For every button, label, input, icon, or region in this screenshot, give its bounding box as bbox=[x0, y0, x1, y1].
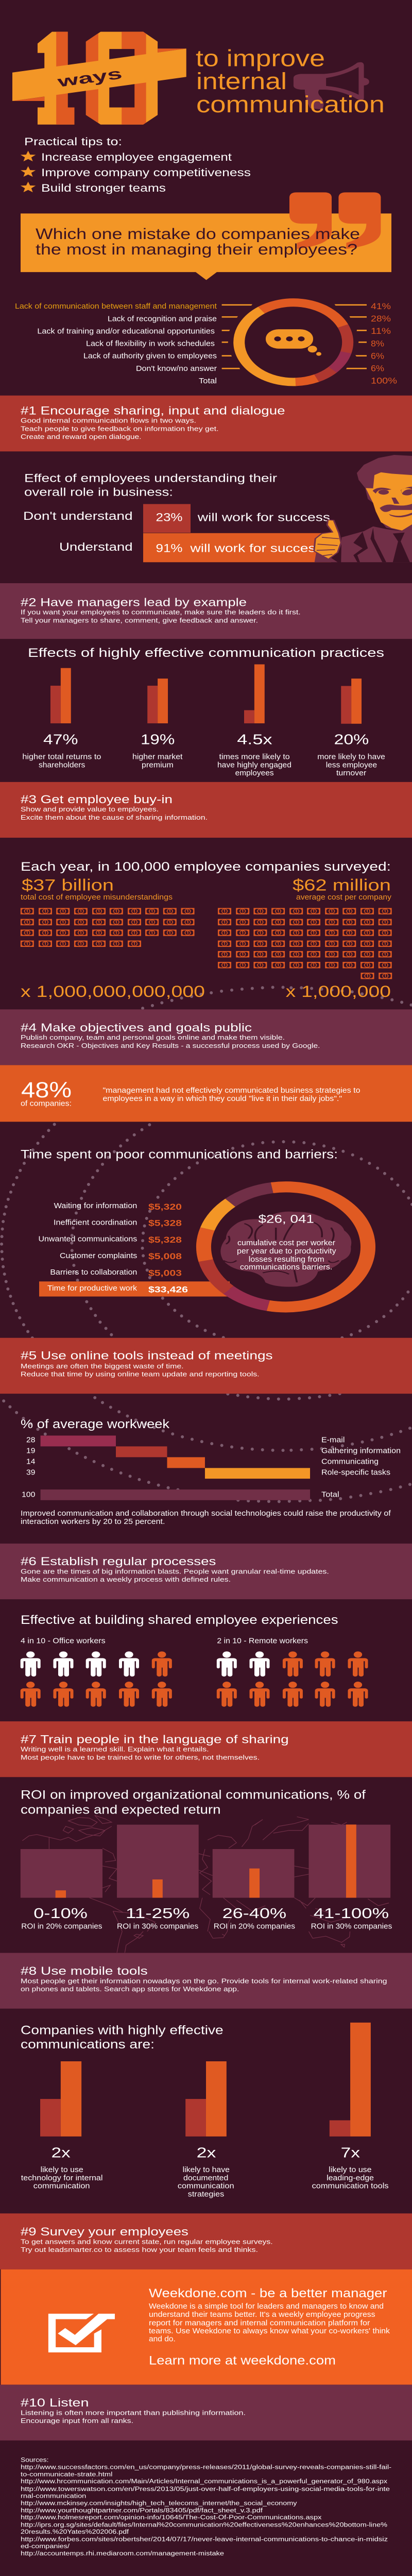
labels: 41-100% bbox=[314, 1906, 389, 1921]
stat: technology: technology for internal bbox=[21, 2174, 102, 2182]
stat: documented strategies bbox=[178, 2145, 234, 2198]
bars bbox=[40, 2023, 371, 2137]
stat: 37 billion: $37 billion bbox=[22, 876, 114, 894]
remote workers bbox=[217, 1636, 368, 1707]
stat: 4.5x: employees bbox=[235, 769, 274, 777]
heading bbox=[21, 1788, 366, 1817]
icon: thought bubble bbox=[266, 329, 321, 356]
labels: 26-40% bbox=[222, 1906, 286, 1921]
multipliers bbox=[21, 982, 391, 1001]
chart: companies with effective communications bbox=[21, 2023, 389, 2198]
legend labels: E-mail bbox=[321, 1435, 345, 1444]
stat: 37 billion bbox=[21, 876, 173, 901]
row labels: Understand bbox=[59, 540, 133, 553]
cost table: $5,008 bbox=[148, 1252, 182, 1261]
panel: tip 6: Gone are the times of big information blasts. People want granular real-time updates. bbox=[21, 1568, 329, 1575]
office workers: 4 in 10 - Office workers bbox=[21, 1636, 106, 1645]
bars bbox=[143, 504, 331, 562]
stat: leading-edge tools: 7x bbox=[341, 2145, 360, 2161]
labels: Lack of communication between staff and management bbox=[15, 302, 217, 311]
cost table: Waiting for information bbox=[54, 1201, 137, 1210]
text block: practical tips: Build stronger teams bbox=[41, 182, 166, 194]
panel: tip 4: Publish company, team and personal goals online and make them visible. bbox=[21, 1034, 285, 1041]
values: 100 bbox=[22, 1490, 36, 1499]
row labels: Don't understand bbox=[23, 509, 133, 522]
heading: communications are: bbox=[21, 2038, 154, 2052]
values: 6% bbox=[371, 364, 384, 374]
icons: money grid left bbox=[21, 908, 195, 947]
illustration: man with thumbs up bbox=[314, 455, 412, 562]
title: communication bbox=[196, 91, 385, 117]
stat: 19% bbox=[132, 732, 183, 769]
stat: documented strategies: 2x bbox=[197, 2145, 216, 2161]
values bbox=[22, 1435, 36, 1499]
text block: practical tips bbox=[21, 136, 251, 194]
stat: 47%: higher total returns to bbox=[22, 752, 101, 761]
labels: 11-25% bbox=[126, 1906, 190, 1921]
title: internal bbox=[196, 68, 287, 94]
labels: 0-10% bbox=[33, 1906, 88, 1921]
panel: tip 3: Excite them about the cause of sharing information. bbox=[21, 814, 208, 821]
text block: sources bbox=[21, 2457, 391, 2557]
panel: tip 1: Teach people to give feedback on information they get. bbox=[21, 426, 218, 433]
chart: cost of misunderstandings bbox=[21, 860, 392, 1001]
heading: Effective at building shared employee experiences bbox=[21, 1613, 338, 1627]
stat: 62 million: $62 million bbox=[293, 876, 391, 894]
stat: 20%: more likely to have bbox=[317, 752, 385, 761]
stat: leading-edge tools bbox=[312, 2145, 389, 2190]
stat: 20%: 20% bbox=[334, 732, 369, 748]
values bbox=[371, 302, 397, 386]
illustration: world map outline bbox=[22, 1816, 389, 1953]
office workers bbox=[21, 1636, 172, 1707]
panel: tip 8: on phones and tablets. Search app stores for Weekdone app. bbox=[21, 1986, 239, 1993]
note bbox=[21, 1509, 391, 1526]
stat: 47%: shareholders bbox=[39, 760, 85, 769]
cost table: Unwanted communications bbox=[38, 1234, 138, 1243]
heading bbox=[24, 471, 277, 498]
panel: tip 8: #8 Use mobile tools bbox=[21, 1964, 148, 1977]
panel: 48 percent quote: of companies: bbox=[21, 1099, 72, 1108]
multipliers: x 1,000,000 bbox=[286, 982, 391, 1001]
panel: tip 7: #7 Train people in the language of sharing bbox=[21, 1733, 289, 1746]
labels bbox=[21, 1906, 392, 1930]
title: to improve bbox=[196, 45, 325, 72]
ring text: per year due to productivity bbox=[237, 1246, 336, 1255]
values: 39 bbox=[26, 1468, 35, 1477]
stat: documented strategies: strategies bbox=[188, 2190, 224, 2198]
panel: tip 9: To get answers and know current state, run regular employee surveys. bbox=[21, 2239, 273, 2246]
heading: Effect of employees understanding their bbox=[24, 471, 277, 484]
chart: percent of average workweek bbox=[21, 1417, 401, 1526]
promo copy: Learn more at weekdone.com bbox=[149, 2353, 336, 2367]
cost table: Time for productive work bbox=[47, 1284, 137, 1292]
heading: % of average workweek bbox=[21, 1417, 170, 1431]
heading: overall role in business: bbox=[24, 485, 173, 498]
icon: big number 10 with ways ribbon bbox=[12, 32, 186, 125]
bars bbox=[21, 1824, 390, 1898]
panel: tip 3: Show and provide value to employees. bbox=[21, 806, 159, 813]
heading: Time spent on poor communications and barriers: bbox=[21, 1148, 338, 1161]
values: 14 bbox=[26, 1457, 36, 1466]
cost table bbox=[38, 1201, 188, 1295]
panel: tip 6: #6 Establish regular processes bbox=[21, 1555, 216, 1568]
panel: tip 4 bbox=[0, 1009, 412, 1065]
panel: tip 7 bbox=[0, 1721, 412, 1777]
stat: 4.5x: 4.5x bbox=[237, 732, 272, 748]
values: 28% bbox=[371, 314, 391, 324]
cost table: Customer complaints bbox=[60, 1251, 138, 1260]
panel: Weekdone promo bbox=[1, 2269, 412, 2385]
panel: tip 3: #3 Get employee buy-in bbox=[21, 793, 173, 806]
panel: tip 1 bbox=[0, 396, 412, 451]
panel: tip 1: Create and reward open dialogue. bbox=[21, 433, 141, 440]
cost table: Inefficient coordination bbox=[54, 1218, 137, 1227]
labels: Lack of flexibility in work schedules bbox=[86, 339, 215, 348]
panel: tip 7: Most people have to be trained to write for others, not themselves. bbox=[21, 1754, 260, 1761]
legend labels: Role-specific tasks bbox=[321, 1468, 390, 1477]
chart: shared employee experiences bbox=[21, 1613, 368, 1707]
bars: 23% bbox=[156, 511, 182, 523]
labels: ROI in 20% companies bbox=[214, 1922, 295, 1930]
ring text: losses resulting from bbox=[249, 1255, 324, 1263]
cost table: $5,003 bbox=[148, 1268, 182, 1278]
stat: technology: likely to use bbox=[41, 2165, 83, 2174]
stat: technology: communication bbox=[33, 2181, 90, 2190]
text block: practical tips: Practical tips to: bbox=[24, 136, 122, 148]
icon: big number 10 with ways ribbon: ways bbox=[55, 65, 124, 91]
text block: sources: http://www.mckinsey.com/insights/high_tech_telecoms_internet/the_social_economy bbox=[21, 2500, 297, 2507]
stat: 37 billion: total cost of employee misunderstandings bbox=[21, 892, 173, 901]
heading: Effects of highly effective communication practices bbox=[28, 646, 384, 660]
text block: practical tips: Increase employee engagement bbox=[41, 151, 232, 163]
icon: megaphone bbox=[294, 62, 369, 110]
stat: 4.5x: times more likely to bbox=[219, 752, 290, 761]
stat: leading-edge tools: leading-edge bbox=[327, 2174, 374, 2182]
panel: tip 10: #10 Listen bbox=[21, 2396, 89, 2409]
cost table: $33,426 bbox=[148, 1285, 188, 1295]
panel: tip 6 bbox=[0, 1544, 412, 1599]
panel: tip 9 bbox=[0, 2213, 412, 2269]
heading: companies and expected return bbox=[21, 1803, 221, 1817]
stat: 20% bbox=[317, 732, 385, 777]
labels: Total bbox=[199, 377, 217, 385]
icon: checkbox bbox=[48, 2314, 115, 2352]
labels: Lack of authority given to employees bbox=[83, 351, 217, 360]
bars bbox=[50, 664, 362, 724]
panel: tip 2: If you want your employees to communicate, make sure the leaders do it first. bbox=[21, 609, 301, 616]
cost ring bbox=[169, 1162, 402, 1332]
panel: tip 7: Writing well is a learned skill. Explain what it entails. bbox=[21, 1746, 209, 1753]
panel: tip 1: Good internal communication flows in two ways. bbox=[21, 417, 196, 425]
chart: understanding role bbox=[23, 455, 412, 562]
labels bbox=[15, 302, 217, 385]
values: 6% bbox=[371, 351, 384, 361]
donut ring bbox=[217, 286, 370, 398]
chart: mistakes donut bbox=[15, 286, 397, 398]
total bar bbox=[39, 1281, 230, 1297]
labels: Don't know/no answer bbox=[136, 364, 217, 372]
stat: 19%: higher market bbox=[132, 752, 183, 761]
panel: tip 2: Tell your managers to share, comment, give feedback and answer. bbox=[21, 617, 258, 624]
bars: 91% bbox=[156, 541, 182, 555]
multipliers: x 1,000,000,000,000 bbox=[21, 982, 205, 1001]
panel: tip 9: #9 Survey your employees bbox=[21, 2225, 188, 2238]
panel: tip 2: #2 Have managers lead by example bbox=[21, 596, 247, 609]
panel: tip 6: Make communication a weekly process with defined rules. bbox=[21, 1576, 231, 1583]
panel: tip 3 bbox=[0, 782, 412, 838]
note: interaction workers by 20 to 25 percent. bbox=[21, 1517, 165, 1526]
stat: documented strategies: communication bbox=[178, 2181, 234, 2190]
stat: 19%: premium bbox=[142, 760, 174, 769]
text block: sources: ed-companies/ bbox=[21, 2543, 70, 2550]
cost table: $5,320 bbox=[148, 1202, 182, 1212]
stat: 20%: less employee bbox=[326, 760, 377, 769]
stat: 19%: 19% bbox=[141, 732, 175, 748]
values: 100% bbox=[371, 376, 397, 386]
legend labels bbox=[321, 1435, 401, 1499]
text block: sources: Sources: bbox=[21, 2457, 48, 2464]
stat: 4.5x bbox=[217, 732, 291, 777]
heading bbox=[21, 2024, 224, 2052]
stat: technology bbox=[21, 2145, 102, 2190]
stat: documented strategies: documented bbox=[183, 2174, 228, 2182]
text block: sources: http://accountemps.rhi.mediaroom.com/management-mistake bbox=[21, 2550, 224, 2557]
ring text: cumulative cost per worker bbox=[237, 1239, 335, 1247]
text block: sources: rnal-communication bbox=[21, 2493, 86, 2500]
labels: Lack of recognition and praise bbox=[108, 314, 217, 323]
ring text bbox=[237, 1212, 336, 1272]
ring text: communications barriers. bbox=[240, 1263, 332, 1272]
text block: sources: to-communicate-strate.html bbox=[21, 2471, 112, 2478]
promo copy bbox=[149, 2286, 390, 2367]
panel: tip 10: Listening is often more important than publishing information. bbox=[21, 2410, 246, 2417]
cost table: $5,328 bbox=[148, 1235, 182, 1245]
row labels bbox=[23, 509, 133, 553]
callout: question: Which one mistake do companies make bbox=[36, 226, 360, 243]
values: 11% bbox=[371, 327, 391, 336]
leader ticks bbox=[222, 304, 367, 369]
stat: leading-edge tools: likely to use bbox=[329, 2165, 371, 2174]
labels: ROI in 20% companies bbox=[21, 1922, 102, 1930]
bars: will work for success bbox=[197, 511, 330, 523]
legend labels: Communicating bbox=[321, 1457, 379, 1466]
callout: question: the most in managing their employees? bbox=[36, 241, 357, 258]
values: 8% bbox=[371, 339, 384, 348]
panel: tip 5: Meetings are often the biggest waste of time. bbox=[21, 1363, 184, 1370]
chart: ROI by expected return bbox=[21, 1788, 392, 1930]
panel: tip 10: Encourage input from all ranks. bbox=[21, 2417, 133, 2425]
text block: sources: 20results.%20Yates%202006.pdf bbox=[21, 2529, 129, 2535]
promo copy: and do. bbox=[149, 2334, 176, 2343]
text block: practical tips: Improve company competitiveness bbox=[41, 167, 251, 179]
panel: 48 percent quote: employees in a way in which they could "live it in their daily jobs"." bbox=[103, 1094, 342, 1103]
panel: tip 10 bbox=[0, 2385, 412, 2441]
text block: sources: http://www.holmesreport.com/opinion-info/10645/The-Cost-Of-Poor-Communications.aspx bbox=[21, 2514, 322, 2521]
panel: tip 4: Research OKR - Objectives and Key Results - a successful process used by Google. bbox=[21, 1042, 320, 1049]
bars bbox=[41, 1435, 310, 1500]
labels: ROI in 30% companies bbox=[117, 1922, 198, 1930]
chart: effects of effective communication bbox=[22, 646, 385, 777]
chart: time spent on poor communications bbox=[21, 1148, 402, 1332]
text block: sources: http://www.yourthoughtpartner.com/Portals/83405/pdf/fact_sheet_v.3.pdf bbox=[21, 2507, 263, 2514]
cost table: Barriers to collaboration bbox=[50, 1268, 137, 1276]
panel: tip 9: Try out leadsmarter.co to assess how your team feels and thinks. bbox=[21, 2246, 258, 2253]
remote workers: 2 in 10 - Remote workers bbox=[217, 1636, 308, 1645]
panel: tip 5: #5 Use online tools instead of meetings bbox=[21, 1349, 273, 1362]
values: 19 bbox=[26, 1446, 35, 1455]
labels: Lack of training and/or educational opportunities bbox=[37, 327, 215, 335]
values: 28 bbox=[26, 1435, 35, 1444]
stat: 62 million bbox=[293, 876, 391, 901]
panel: tip 4: #4 Make objectives and goals public bbox=[21, 1021, 252, 1034]
callout: question bbox=[21, 192, 391, 280]
panel: tip 2 bbox=[0, 583, 412, 639]
panel: tip 1: #1 Encourage sharing, input and dialogue bbox=[21, 404, 285, 417]
stat: 20%: turnover bbox=[336, 769, 366, 777]
panel: tip 5 bbox=[0, 1338, 412, 1394]
bars: will work for success bbox=[190, 541, 323, 555]
panel: tip 8 bbox=[0, 1953, 412, 2009]
stat: 47%: 47% bbox=[43, 732, 78, 748]
stat: 4.5x: have highly engaged bbox=[217, 760, 291, 769]
stat: leading-edge tools: communication tools bbox=[312, 2181, 389, 2190]
heading: Companies with highly effective bbox=[21, 2024, 224, 2038]
icon: brain bbox=[220, 1212, 351, 1287]
legend labels: Total bbox=[321, 1490, 339, 1499]
panel: tip 5: Reduce that time by using online team update and reporting tools. bbox=[21, 1371, 260, 1378]
title bbox=[196, 45, 385, 117]
stat: technology: 2x bbox=[52, 2145, 71, 2161]
stat: 47% bbox=[22, 732, 101, 769]
icons: money grid right bbox=[218, 908, 392, 979]
ring text: $26, 041 bbox=[258, 1212, 314, 1226]
panel: 48 percent quote bbox=[0, 1065, 412, 1122]
stat: documented strategies: likely to have bbox=[183, 2165, 230, 2174]
cost table: $5,328 bbox=[148, 1219, 182, 1228]
values: 41% bbox=[371, 302, 391, 311]
panel: 48 percent quote: 48% bbox=[21, 1078, 72, 1102]
